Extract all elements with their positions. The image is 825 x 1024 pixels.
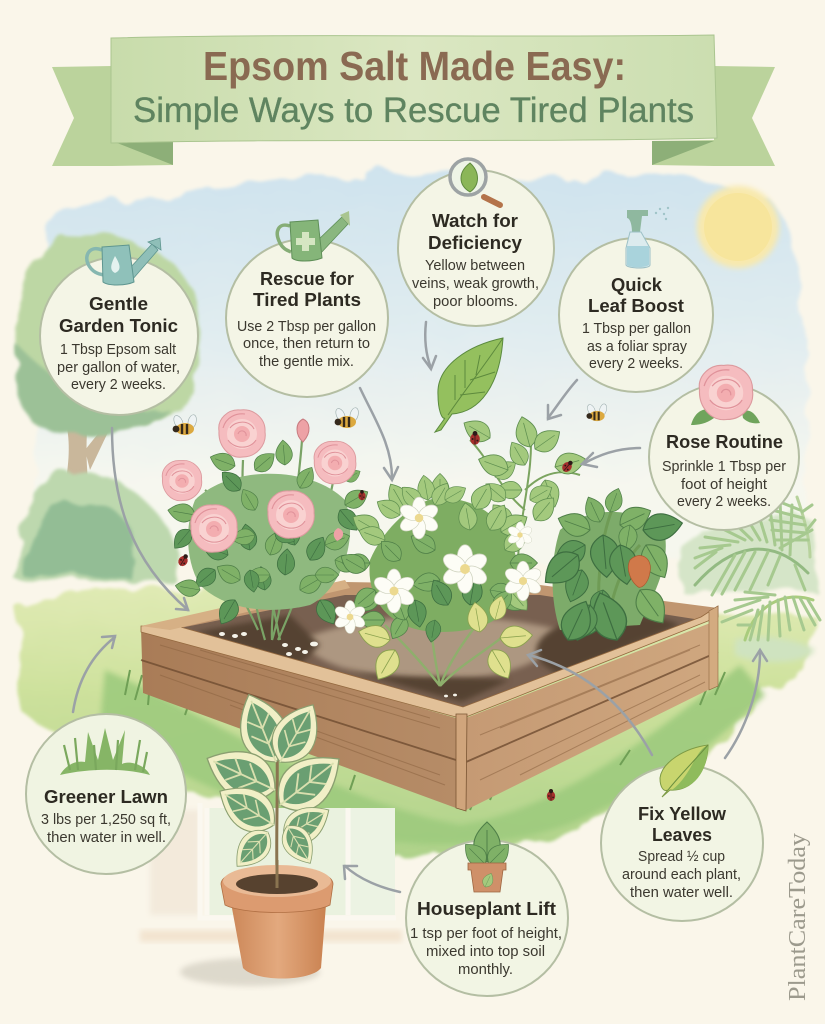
pepper plant	[536, 486, 685, 646]
palm fronds	[695, 495, 820, 640]
arrow: rescue to gardenia	[360, 388, 398, 480]
rose blooms	[219, 410, 265, 457]
stems	[205, 440, 334, 640]
window frame	[200, 803, 396, 918]
arrow: tonic to bed	[112, 428, 188, 610]
grass shading around the bed	[100, 665, 765, 845]
panel: greener lawn	[26, 714, 186, 874]
ribbon tail left	[52, 66, 173, 166]
body text: Use 2 Tbsp per gallon	[237, 319, 376, 335]
sun glow	[697, 186, 779, 268]
back wall	[170, 582, 718, 640]
soil	[170, 595, 701, 708]
icon: yellowing leaf	[660, 745, 708, 797]
body text: once, then return to	[243, 336, 370, 352]
arrows	[73, 322, 767, 892]
stems	[470, 425, 580, 560]
heading: Garden Tonic	[59, 316, 178, 336]
soil dark patch	[195, 614, 680, 702]
heading: Watch for	[432, 211, 518, 231]
icon: spray bottle	[626, 207, 669, 268]
body text	[410, 926, 562, 978]
circle	[40, 257, 198, 415]
arrow: yellow leaves to palm	[725, 650, 767, 758]
left face	[141, 628, 456, 808]
body text	[41, 812, 171, 846]
floor band	[140, 930, 402, 942]
soil	[236, 874, 318, 894]
rim	[141, 606, 718, 717]
tree foliage	[18, 234, 200, 431]
gardenia flowers	[398, 497, 440, 539]
body text: around each plant,	[622, 867, 741, 883]
body text	[412, 258, 539, 310]
rose bud lower	[334, 528, 343, 541]
heading	[638, 804, 727, 845]
arrow: houseplant	[344, 866, 400, 892]
body text: 3 lbs per 1,250 sq ft,	[41, 812, 171, 828]
body text: foot of height	[681, 477, 767, 493]
arrow: lawn	[73, 636, 115, 712]
body text: poor blooms.	[433, 294, 518, 310]
watermark: PlantCareToday	[785, 833, 811, 1001]
epsom salt granules	[219, 632, 457, 697]
body text: every 2 weeks.	[589, 356, 683, 372]
front post	[456, 714, 467, 811]
bees and ladybugs	[172, 403, 608, 801]
heading: Fix Yellow	[638, 804, 727, 824]
panel: quick leaf boost	[559, 207, 713, 392]
icon: magnifying glass	[450, 159, 500, 205]
yellowing leaves	[356, 621, 393, 650]
shrub left	[15, 473, 178, 582]
big green leaf	[435, 338, 503, 432]
heading	[428, 211, 522, 253]
shrub inner	[22, 503, 136, 578]
sun disc	[704, 193, 772, 261]
panel: houseplant lift	[406, 822, 568, 996]
circle	[26, 714, 186, 874]
circle	[398, 170, 554, 326]
right face	[466, 620, 718, 810]
icon: grass tuft	[60, 728, 150, 775]
background lawn	[18, 588, 812, 857]
window behind houseplant	[140, 803, 402, 942]
heading: Gentle	[89, 294, 148, 314]
grass tufts	[125, 670, 725, 810]
circle	[226, 239, 388, 397]
soil light patch	[300, 616, 560, 680]
body text	[57, 342, 180, 393]
variegated leaves	[228, 686, 297, 771]
stems	[598, 510, 640, 632]
icon: blue watering can	[87, 238, 161, 285]
body text: the gentle mix.	[259, 354, 354, 370]
body text: then water well.	[630, 885, 733, 901]
gardenia bush	[333, 474, 543, 686]
leaves	[512, 414, 540, 450]
distant trees right	[680, 510, 815, 590]
backdrop	[552, 512, 666, 630]
tree trunk	[64, 415, 110, 480]
icon: rose	[691, 365, 760, 425]
body text	[237, 319, 376, 370]
heading	[253, 269, 361, 310]
body text: Sprinkle 1 Tbsp per	[662, 459, 786, 475]
plant stem	[275, 745, 279, 880]
right post	[709, 606, 718, 690]
arrow: yellow leaves to gardenia	[528, 650, 652, 755]
icon: green watering can	[277, 211, 350, 261]
tree left	[18, 234, 200, 480]
plank grooves	[141, 652, 718, 762]
arrow: watch to leaf	[423, 322, 436, 369]
body text: every 2 weeks.	[71, 377, 166, 393]
ribbon fold right	[652, 141, 714, 165]
rose bush	[162, 410, 372, 640]
heading: Rescue for	[260, 269, 354, 289]
body text: Yellow between	[425, 258, 525, 274]
pot shadow	[180, 958, 320, 986]
back left rim	[141, 580, 350, 630]
body text: per gallon of water,	[57, 360, 180, 376]
body text: mixed into top soil	[426, 944, 545, 960]
panel: rescue for tired plants	[226, 211, 388, 397]
wall stain	[150, 810, 200, 915]
right lawn stain	[735, 637, 815, 662]
leaves	[431, 474, 449, 501]
title line 2: Simple Ways to Rescue Tired Plants	[133, 91, 694, 130]
wood grain	[160, 645, 705, 785]
body text: veins, weak growth,	[412, 276, 539, 292]
pot top	[223, 865, 331, 897]
heading: Tired Plants	[253, 290, 361, 310]
panel: rose routine	[649, 365, 799, 530]
heading	[59, 294, 178, 336]
rose bud	[297, 419, 309, 442]
shrub outer	[15, 473, 178, 582]
foliage shadow	[15, 345, 170, 434]
tall plant behind	[459, 414, 588, 560]
panel: watch for deficiency	[398, 159, 554, 326]
body text	[582, 321, 691, 372]
heading: Quick	[611, 275, 663, 295]
sun	[697, 186, 779, 268]
body text	[662, 459, 786, 510]
window right pane	[350, 808, 395, 915]
window panes	[208, 808, 348, 915]
heading: Leaves	[652, 825, 712, 845]
circle	[559, 238, 713, 392]
body text: 1 tsp per foot of height,	[410, 926, 562, 942]
leaves	[207, 449, 238, 474]
ribbon tail right	[652, 66, 775, 166]
canopy backdrop	[369, 498, 518, 632]
ribbon fold left	[112, 141, 173, 165]
heading: Deficiency	[428, 233, 522, 253]
body text: 1 Tbsp per gallon	[582, 321, 691, 337]
body text: Spread ½ cup	[638, 849, 725, 865]
body text	[622, 849, 741, 901]
backdrop	[188, 474, 350, 610]
heading: Leaf Boost	[588, 296, 684, 316]
title line 1: Epsom Salt Made Easy:	[203, 43, 626, 89]
watercolor sky wash	[36, 171, 809, 560]
circle	[406, 840, 568, 996]
banner body	[111, 35, 717, 143]
arrow: quick to tall plant	[548, 380, 577, 419]
pepper fruit	[628, 556, 650, 587]
heading: Houseplant Lift	[417, 899, 556, 919]
body text: every 2 weeks.	[677, 494, 771, 510]
pot rim	[221, 868, 333, 912]
arrow: rose routine to plant	[582, 448, 640, 467]
body text: monthly.	[458, 962, 513, 978]
stems	[385, 610, 505, 686]
pot body	[229, 892, 327, 978]
panel: fix yellow leaves	[601, 745, 763, 921]
title banner	[52, 35, 775, 166]
panel: gentle garden tonic	[40, 238, 198, 415]
plant stem base	[276, 860, 278, 888]
body text: as a foliar spray	[587, 339, 688, 355]
heading: Greener Lawn	[44, 787, 168, 807]
raised garden bed	[141, 580, 718, 811]
circle	[649, 384, 799, 530]
heading	[588, 275, 684, 316]
heading: Rose Routine	[666, 432, 783, 452]
leaves	[580, 493, 608, 526]
body text: then water in well.	[47, 830, 166, 846]
potted houseplant	[197, 686, 353, 978]
icon: potted plant	[459, 822, 515, 892]
body text: 1 Tbsp Epsom salt	[60, 342, 176, 358]
circle	[601, 765, 763, 921]
